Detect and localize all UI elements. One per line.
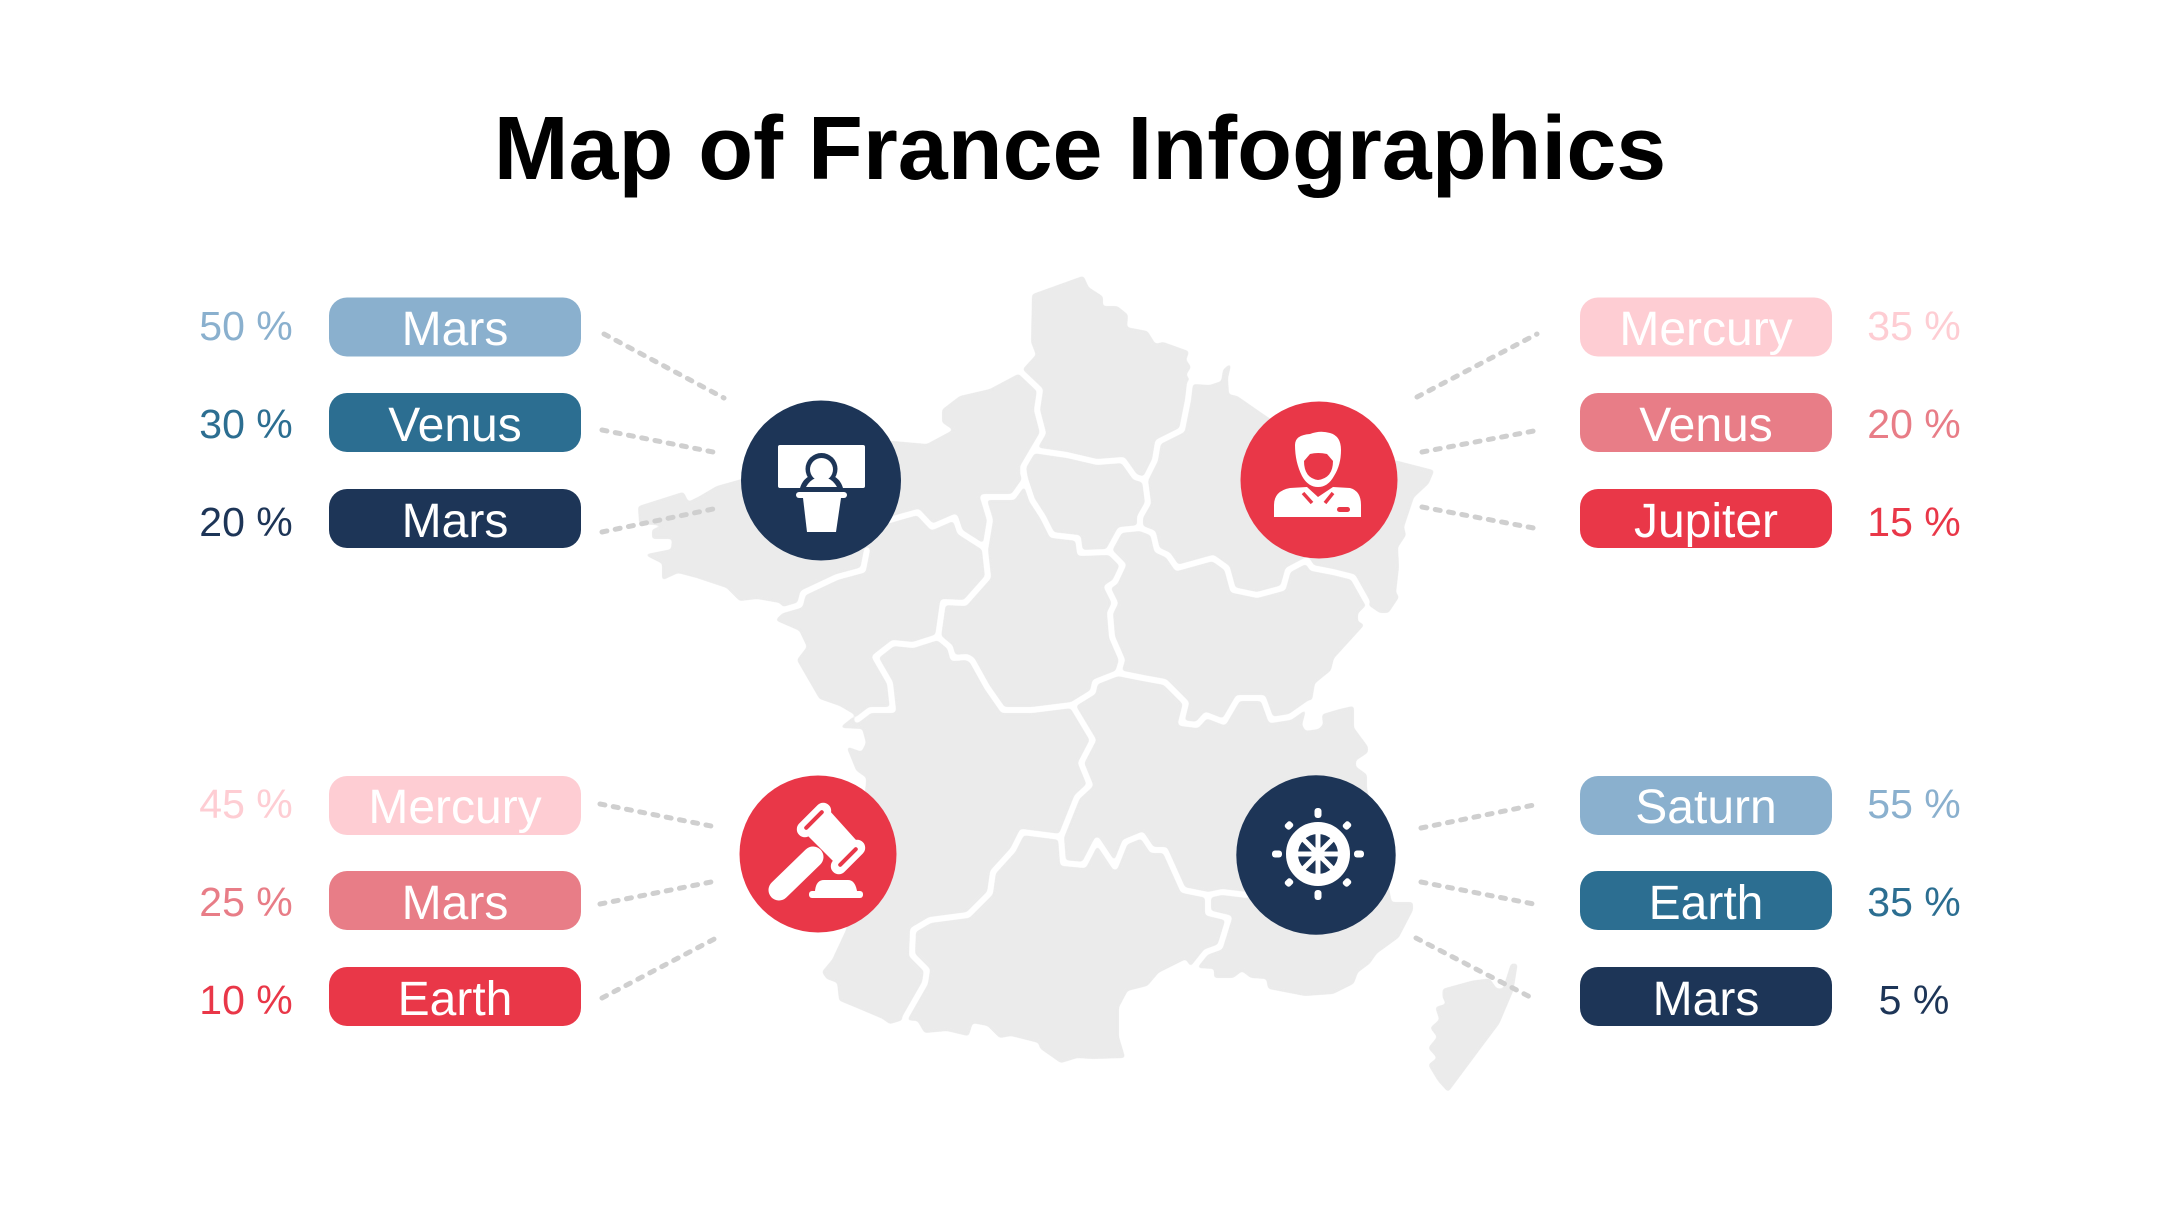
title: Map of France Infographics [494,99,1666,199]
row: Saturn 55 %: 55 % [1867,781,1961,827]
row: Mars 50 % [199,298,581,356]
panel: bottom left list [199,776,581,1026]
row: Venus 20 %: 20 % [1867,401,1961,447]
row: Mars 50 %: 50 % [199,303,293,349]
row: Earth 10 %: Earth [398,973,512,1026]
row: Mars 5 %: 5 % [1879,977,1949,1023]
row: Mars 5 % [1580,967,1949,1026]
row: Saturn 55 % [1580,776,1961,835]
row: Jupiter 15 %: Jupiter [1634,495,1778,548]
row: Mercury 45 % [199,776,581,835]
row: Mercury 35 %: 35 % [1867,303,1961,349]
row: Earth 10 %: 10 % [199,977,293,1023]
icon: ship wheel [1236,775,1396,935]
row: Venus 30 %: 30 % [199,401,293,447]
panel: top right list [1580,298,1961,548]
row: Earth 10 % [199,967,581,1026]
row: Venus 20 % [1580,393,1961,452]
row: Venus 30 %: Venus [388,399,522,452]
map of France [639,277,1516,1090]
icon: man in uniform [1240,402,1398,558]
row: Mercury 45 %: 45 % [199,781,293,827]
row: Mercury 35 %: Mercury [1619,303,1793,356]
row: Mars 25 % [199,871,581,930]
row: Venus 30 % [199,393,581,452]
row: Mars 25 %: Mars [402,877,508,930]
icon: speaker at podium [741,400,901,560]
panel: top left list [199,298,581,548]
row: Jupiter 15 %: 15 % [1867,499,1961,545]
row: Earth 35 %: 35 % [1867,879,1961,925]
panel: bottom right list [1580,776,1961,1026]
row: Mars 50 %: Mars [402,303,508,356]
connector lines: bottom left [600,804,720,998]
row: Mars 20 % [199,489,581,548]
row: Jupiter 15 % [1580,489,1961,548]
row: Mars 20 %: 20 % [199,499,293,545]
row: Mars 20 %: Mars [402,495,508,548]
connector lines: top left [602,334,724,532]
connector lines: top right [1417,334,1539,529]
icon: judge gavel [740,776,896,932]
row: Earth 35 % [1580,871,1961,930]
row: Earth 35 %: Earth [1649,877,1763,930]
row: Mars 5 %: Mars [1653,973,1759,1026]
row: Saturn 55 %: Saturn [1635,781,1777,834]
connector lines: bottom right [1416,804,1539,999]
row: Mercury 45 %: Mercury [368,781,542,834]
row: Mercury 35 % [1580,298,1961,356]
row: Mars 25 %: 25 % [199,879,293,925]
row: Venus 20 %: Venus [1639,399,1773,452]
